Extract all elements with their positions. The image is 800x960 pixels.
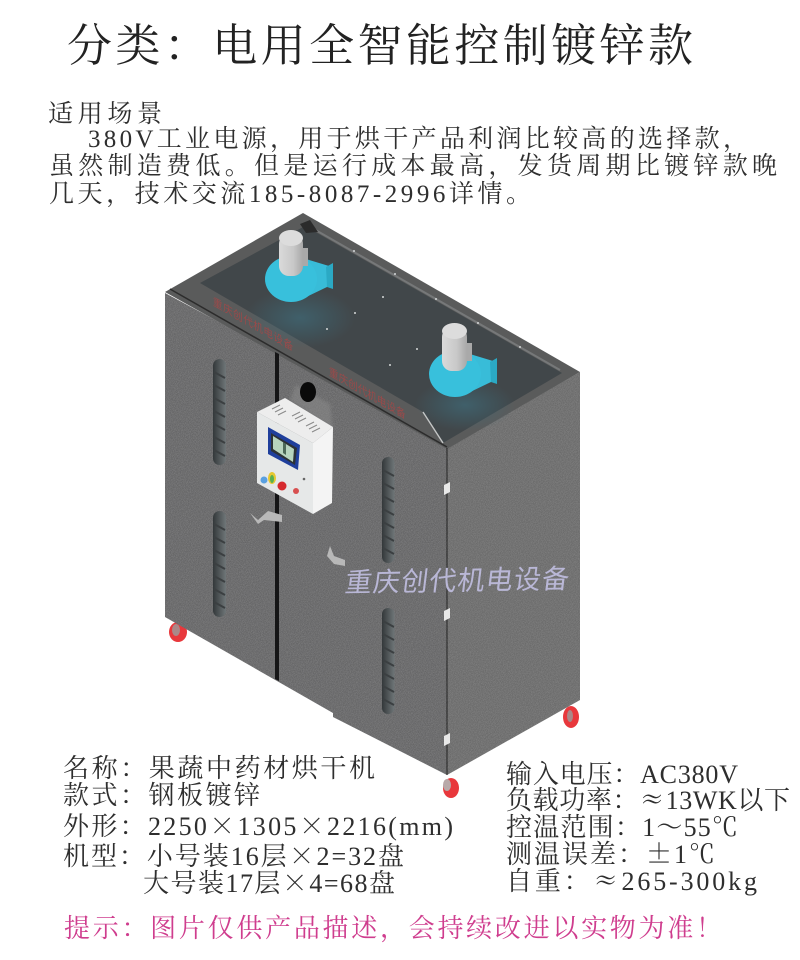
spec: temperature range: 控温范围：1～55℃ [506,807,738,844]
vent slot: right door upper [382,457,394,563]
door handle: left [250,511,282,524]
spec: name: 名称：果蔬中药材烘干机 [63,754,375,783]
box front face [257,412,313,514]
caster: rear right [563,706,579,728]
floor shadows [245,288,355,348]
product illustration: drying cabinet [165,213,580,798]
spec: style: 款式：钢板镀锌 [63,781,260,810]
vent slot: right door lower [382,608,394,714]
control box [257,398,333,514]
spec: voltage: 输入电压：AC380V [506,760,738,789]
box vents [272,405,320,432]
description line 3: 几天，技术交流185-8087-2996详情。 [49,180,531,208]
watermark: 重庆创代机电设备 [343,557,572,600]
cable hole [300,382,316,402]
cabinet side face [447,372,580,775]
spec: power: 负载功率：≈13WK以下 [506,780,790,817]
spec: dimensions: 外形：2250×1305×2216(mm) [63,806,453,843]
cabinet front face [165,293,447,775]
text block: usage scenario [48,100,777,208]
hole glare [290,385,333,430]
rim red lettering: 重庆创代机电设备 [329,363,406,423]
hinges [444,482,450,746]
subheading: 适用场景 [48,100,162,128]
rivets [326,250,521,366]
door gap [275,352,279,681]
spec: weight: 自重：≈265-300kg [506,861,757,898]
spec: model large: 大号装17层×4=68盘 [143,863,395,900]
door handle: right [327,546,345,566]
notice: 提示：图片仅供产品描述，会持续改进以实物为准！ [64,914,722,943]
touch screen [268,427,300,470]
fan: right blower [429,323,497,397]
cabinet top rim [165,213,580,449]
specs: right column [506,760,790,898]
rim red lettering: 重庆创代机电设备 [213,293,293,355]
description line 1: 380V工业电源，用于烘干产品利润比较高的选择款， [88,125,748,153]
box top face [257,398,333,443]
caster: front [443,778,459,798]
fan: left blower [265,230,333,302]
spec: temperature error: 测温误差：±1℃ [506,834,715,871]
vent slot: left door upper [213,359,226,465]
top rim details [170,220,560,447]
spec: model small: 机型：小号装16层×2=32盘 [63,836,404,873]
cabinet corner line [446,448,448,775]
specs: left column [63,754,453,900]
box side face [313,427,333,514]
control buttons [260,472,305,494]
title: 分类：电用全智能控制镀锌款 [67,21,693,71]
rim red lettering [213,293,406,423]
caster: rear left [169,622,187,642]
description line 2: 虽然制造费低。但是运行成本最高，发货周期比镀锌款晚 [49,152,777,180]
vent slot: left door lower [213,511,226,617]
top floor panel [200,226,562,443]
